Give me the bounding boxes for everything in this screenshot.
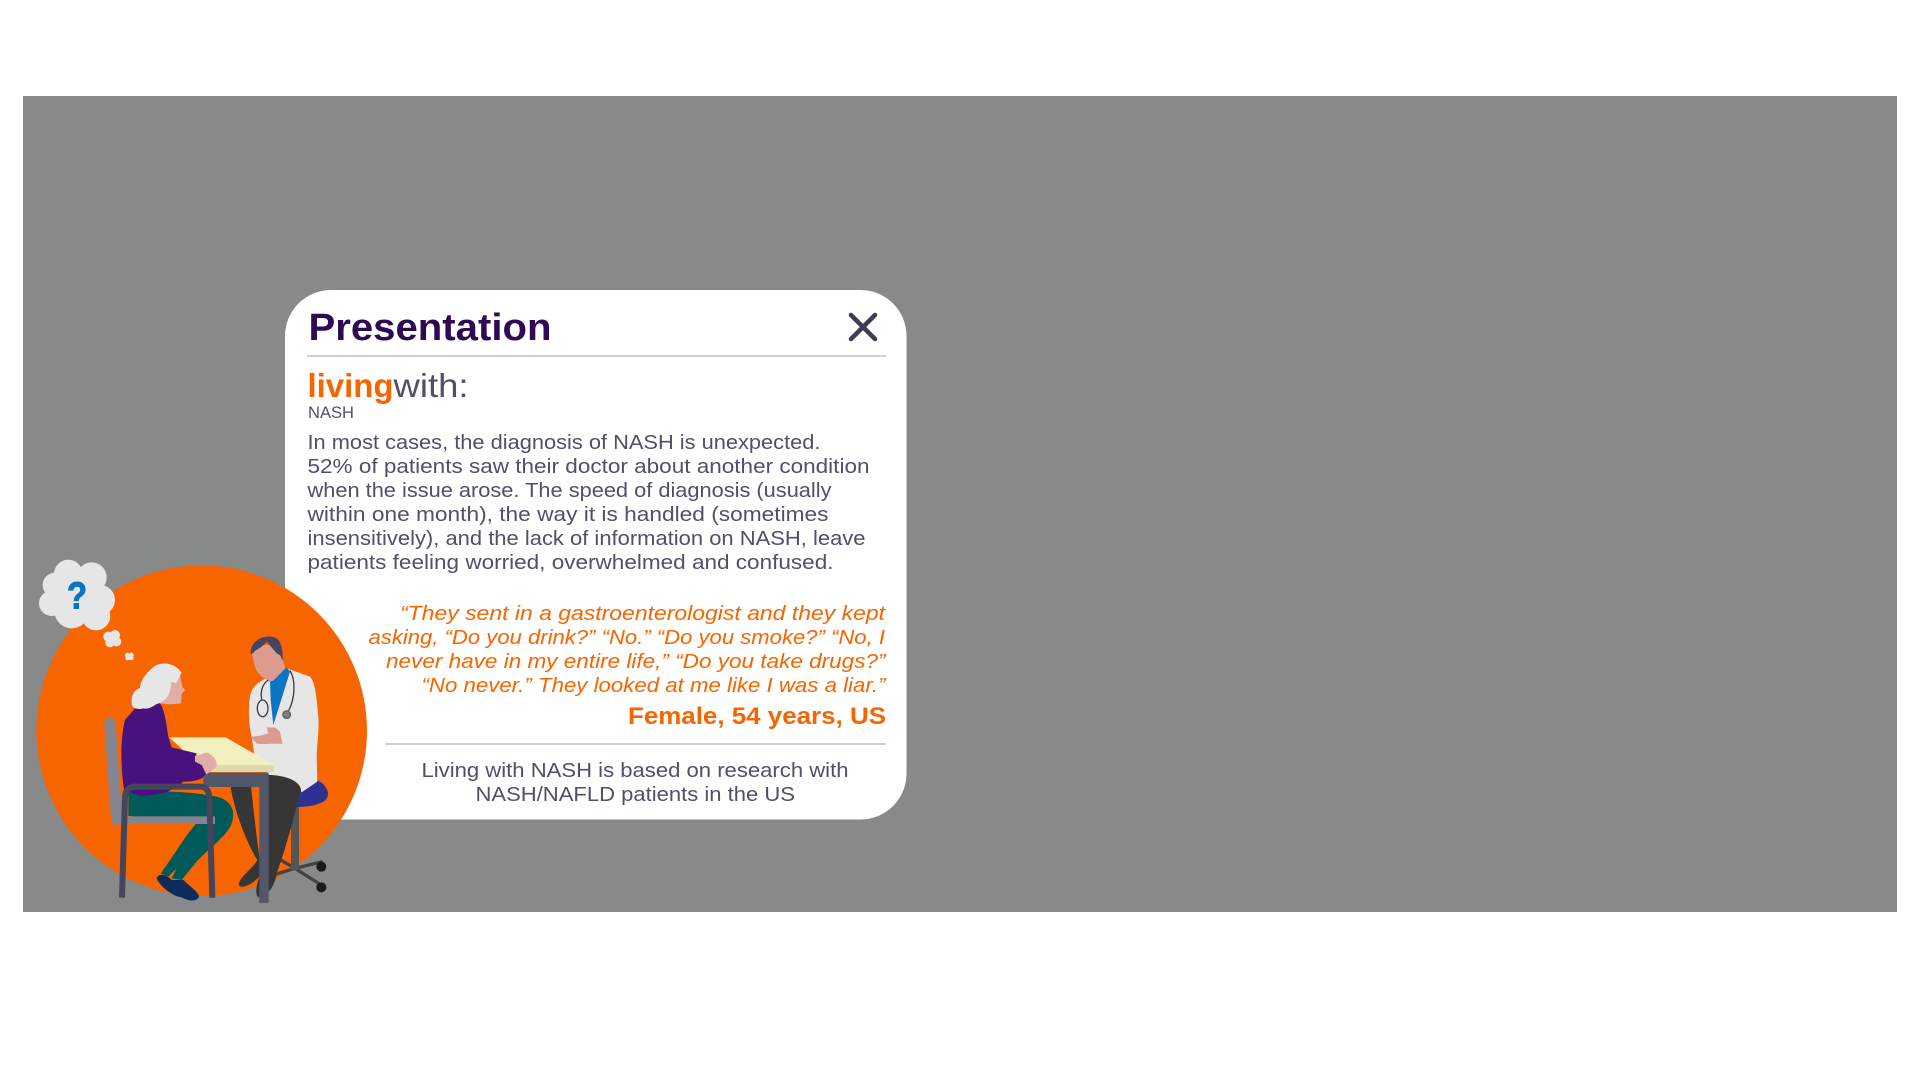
coat: [249, 668, 319, 792]
panel: presentation card: [285, 290, 906, 820]
hair: [251, 636, 283, 661]
doctor: [231, 636, 328, 897]
trousers: [128, 791, 233, 880]
sweater: [121, 703, 205, 796]
logo: livingwith: living: [308, 367, 394, 404]
patient quote: asking, “Do you drink?” “No.” “Do you smoke?” “No, I: [368, 626, 885, 649]
hand: [195, 752, 217, 774]
trousers: [231, 775, 301, 897]
orange circle: [36, 565, 367, 896]
question mark: ?: [67, 575, 87, 617]
chair frame: [122, 787, 212, 898]
footer note: NASH/NAFLD patients in the US: [476, 783, 795, 806]
shirt: [270, 667, 290, 725]
icon: thought cloud: [39, 560, 134, 660]
body text: 52% of patients saw their doctor about another condition: [308, 455, 870, 478]
icon: close cross: [851, 315, 875, 339]
face: [252, 645, 285, 682]
footer note: Living with NASH is based on research with: [422, 759, 848, 782]
footer note: [422, 759, 848, 806]
stool: [268, 780, 328, 892]
patient quote: “They sent in a gastroenterologist and they kept: [400, 602, 886, 625]
body text: within one month), the way it is handled (sometimes: [306, 503, 828, 526]
body text: when the issue arose. The speed of diagnosis (usually: [306, 479, 832, 502]
patient quote: [368, 602, 887, 697]
patient quote: “No never.” They looked at me like I was a liar.”: [422, 674, 887, 697]
body text: insensitively), and the lack of information on NASH, leave: [308, 527, 866, 550]
doctor hand: [250, 727, 283, 744]
body text: [306, 431, 870, 574]
body text: patients feeling worried, overwhelmed and confused.: [308, 551, 834, 574]
quote attribution: Female, 54 years, US: [628, 703, 886, 730]
table: [169, 737, 274, 903]
chair back and seat: [110, 723, 215, 824]
body text: In most cases, the diagnosis of NASH is unexpected.: [308, 431, 820, 454]
hair: [132, 663, 182, 709]
face: [159, 675, 185, 704]
stethoscope: [257, 671, 294, 718]
heading: Presentation: Presentation: [308, 307, 552, 349]
subheading: NASH: NASH: [308, 403, 354, 422]
patient quote: never have in my entire life,” “Do you take drugs?”: [386, 650, 887, 673]
logo: livingwith: with:: [392, 367, 468, 404]
illustration: patient and doctor: [36, 560, 367, 903]
shoes: [157, 875, 199, 901]
patient: [110, 663, 233, 901]
grey background panel: [23, 96, 1897, 912]
